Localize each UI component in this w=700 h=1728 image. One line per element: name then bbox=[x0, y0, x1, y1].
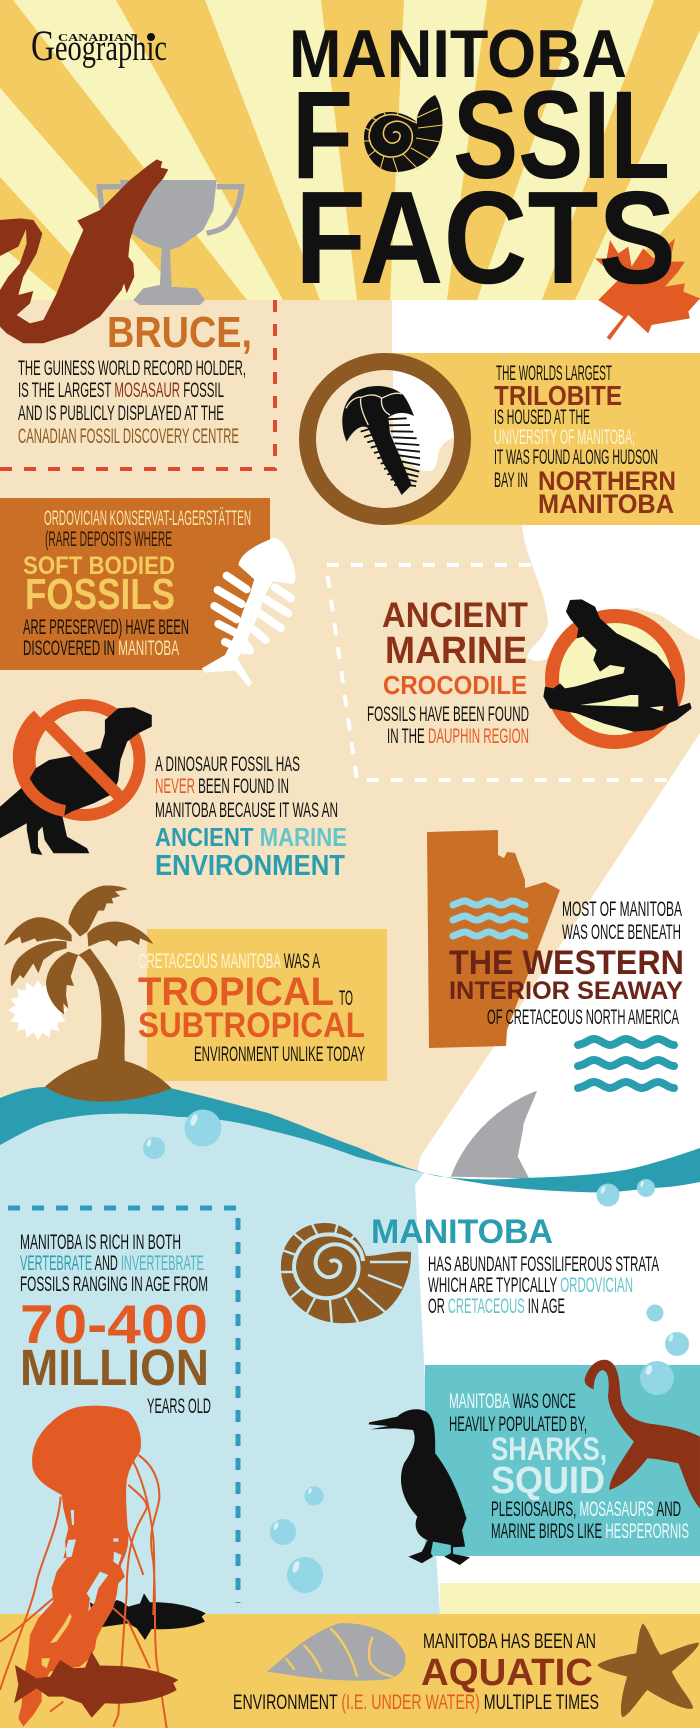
panel: red dashed frame bbox=[0, 300, 275, 469]
icon: crocodile skull bbox=[543, 599, 692, 742]
panel: blue dashed frame bbox=[8, 1208, 238, 1603]
text block: age range: FOSSILS RANGING IN AGE FROM bbox=[20, 1272, 208, 1296]
text block: age range: YEARS OLD bbox=[147, 1394, 211, 1418]
text block: ancient marine crocodile bbox=[367, 596, 529, 748]
text block: western interior seaway: THE WESTERN bbox=[449, 944, 684, 982]
icon: maple leaf bbox=[595, 238, 700, 340]
icon: trilobite circle bbox=[300, 350, 480, 530]
text block: aquatic bbox=[233, 1629, 599, 1714]
text block: Bruce: CANADIAN FOSSIL DISCOVERY CENTRE bbox=[18, 424, 239, 448]
text block: fossiliferous strata bbox=[371, 1213, 659, 1318]
text block: Bruce: IS THE LARGEST MOSASAUR FOSSIL bbox=[18, 378, 224, 402]
panel: marine life bbox=[425, 1365, 700, 1556]
icon: blue waves on map bbox=[453, 901, 525, 936]
background: sunburst rays bbox=[0, 0, 700, 300]
text block: ancient marine crocodile: CROCODILE bbox=[383, 670, 527, 700]
text block: tropical: TROPICAL bbox=[138, 970, 334, 1014]
icon: mosasaur bbox=[0, 159, 168, 343]
text block: age range bbox=[20, 1230, 211, 1418]
panel: trilobite yellow band bbox=[392, 353, 700, 525]
text block: soft bodied fossils: (RARE DEPOSITS WHERE bbox=[45, 527, 172, 551]
text block: tropical: ENVIRONMENT UNLIKE TODAY bbox=[194, 1042, 365, 1066]
icon: shark fin bbox=[451, 1091, 537, 1178]
text block: marine life: SQUID bbox=[491, 1460, 605, 1502]
bottom sand band bbox=[0, 1614, 700, 1728]
text block: marine life: MANITOBA WAS ONCE bbox=[449, 1389, 576, 1413]
icon: black fish bbox=[90, 1593, 206, 1640]
text block: dinosaur: ENVIRONMENT bbox=[155, 850, 345, 882]
icon: starfish bbox=[597, 1623, 699, 1717]
text: ORDOVICIAN KONSERVAT-LAGERSTÄTTEN bbox=[44, 506, 251, 530]
icon: jellyfish bbox=[0, 1406, 167, 1728]
text block: tropical bbox=[138, 949, 365, 1066]
pale yellow strip bbox=[440, 1583, 700, 1614]
panel: white dashed frame bbox=[326, 565, 670, 780]
text block: Bruce bbox=[18, 308, 252, 448]
text block: trilobite: IS HOUSED AT THE bbox=[494, 405, 590, 429]
text block: tropical: TO bbox=[339, 986, 353, 1010]
icon: no dinosaur sign bbox=[0, 705, 152, 855]
logo: Canadian Geographic: Geographic bbox=[31, 23, 167, 70]
text block: trilobite bbox=[494, 361, 676, 519]
title: F bbox=[292, 66, 353, 205]
text block: age range: VERTEBRATE AND INVERTEBRATE bbox=[20, 1251, 204, 1275]
text block: ancient marine crocodile: MARINE bbox=[385, 630, 527, 672]
text block: tropical: SUBTROPICAL bbox=[138, 1006, 365, 1045]
text block: tropical: CRETACEOUS MANITOBA WAS A bbox=[138, 949, 320, 973]
text block: ancient marine crocodile: IN THE DAUPHIN REGION bbox=[387, 724, 529, 748]
text block: soft bodied fossils: DISCOVERED IN MANITOBA bbox=[23, 636, 179, 660]
text block: aquatic: MANITOBA HAS BEEN AN bbox=[423, 1629, 596, 1653]
background: light blue water bbox=[0, 1114, 440, 1614]
icon: plesiosaur bbox=[585, 1360, 700, 1508]
text block: age range: MILLION bbox=[20, 1339, 209, 1396]
icon: palm tree on island bbox=[4, 886, 172, 1102]
text block: soft bodied fossils: SOFT BODIED bbox=[23, 552, 175, 580]
text block: marine life bbox=[449, 1389, 689, 1543]
icon: fish bone bbox=[202, 538, 295, 687]
text block: aquatic: ENVIRONMENT (I.E. UNDER WATER) MULTIPLE TIMES bbox=[233, 1690, 599, 1714]
text block: ancient marine crocodile: FOSSILS HAVE BEEN FOUND bbox=[367, 702, 529, 726]
text block: age range: 70-400 bbox=[20, 1293, 208, 1355]
background: beige and white land shapes bbox=[0, 300, 700, 1614]
text block: dinosaur: MANITOBA BECAUSE IT WAS AN bbox=[155, 798, 338, 822]
text block: western interior seaway: INTERIOR SEAWAY bbox=[449, 977, 683, 1005]
text block: Bruce: AND IS PUBLICLY DISPLAYED AT THE bbox=[18, 401, 224, 425]
icon: trophy bbox=[99, 180, 242, 305]
text block: fossiliferous strata: WHICH ARE TYPICALLY ORDOVICIAN bbox=[428, 1273, 633, 1297]
text block: dinosaur bbox=[155, 752, 347, 882]
text block: ancient marine crocodile: ANCIENT bbox=[382, 596, 528, 635]
icon: white sun bbox=[8, 980, 68, 1040]
text block: aquatic: AQUATIC bbox=[421, 1652, 593, 1694]
text block: dinosaur: NEVER BEEN FOUND IN bbox=[155, 774, 289, 798]
bubbles bbox=[143, 1110, 689, 1593]
text block: Bruce: BRUCE, bbox=[107, 308, 252, 357]
text block: trilobite: MANITOBA bbox=[538, 489, 674, 519]
icon: rust fish bbox=[14, 1652, 178, 1718]
text block: trilobite: TRILOBITE bbox=[494, 380, 622, 411]
sea wave bbox=[0, 1081, 700, 1192]
panel: soft bodied fossils bbox=[0, 498, 270, 670]
logo: Canadian Geographic: CANADIAN bbox=[58, 32, 134, 44]
text block: Bruce: THE GUINESS WORLD RECORD HOLDER, bbox=[18, 356, 246, 380]
title: MANITOBA bbox=[289, 16, 627, 92]
text block: trilobite: BAY IN bbox=[494, 468, 528, 492]
text block: soft bodied fossils bbox=[23, 506, 251, 660]
text block: fossiliferous strata: OR CRETACEOUS IN AGE bbox=[428, 1294, 565, 1318]
text block: western interior seaway bbox=[449, 897, 684, 1029]
text block: soft bodied fossils: FOSSILS bbox=[25, 570, 175, 619]
text block: dinosaur: ANCIENT MARINE bbox=[155, 822, 347, 852]
icon: teal waves bbox=[578, 1039, 674, 1088]
icon: hesperornis bird bbox=[369, 1409, 470, 1565]
icon: ammonite in title bbox=[363, 95, 443, 173]
text block: fossiliferous strata: MANITOBA bbox=[371, 1213, 553, 1251]
text block: trilobite: NORTHERN bbox=[538, 466, 676, 496]
text block: marine life: SHARKS, bbox=[491, 1431, 607, 1467]
text block: age range: MANITOBA IS RICH IN BOTH bbox=[20, 1230, 181, 1254]
text block: soft bodied fossils: ARE PRESERVED) HAVE BEEN bbox=[23, 615, 189, 639]
text block: dinosaur: A DINOSAUR FOSSIL HAS bbox=[155, 752, 300, 776]
title bbox=[289, 16, 676, 311]
icon: Manitoba map bbox=[427, 830, 560, 1048]
icon: brown ammonite bbox=[280, 1222, 411, 1326]
icon: sea shell bbox=[267, 1623, 406, 1681]
panel: tropical bbox=[147, 929, 387, 1081]
